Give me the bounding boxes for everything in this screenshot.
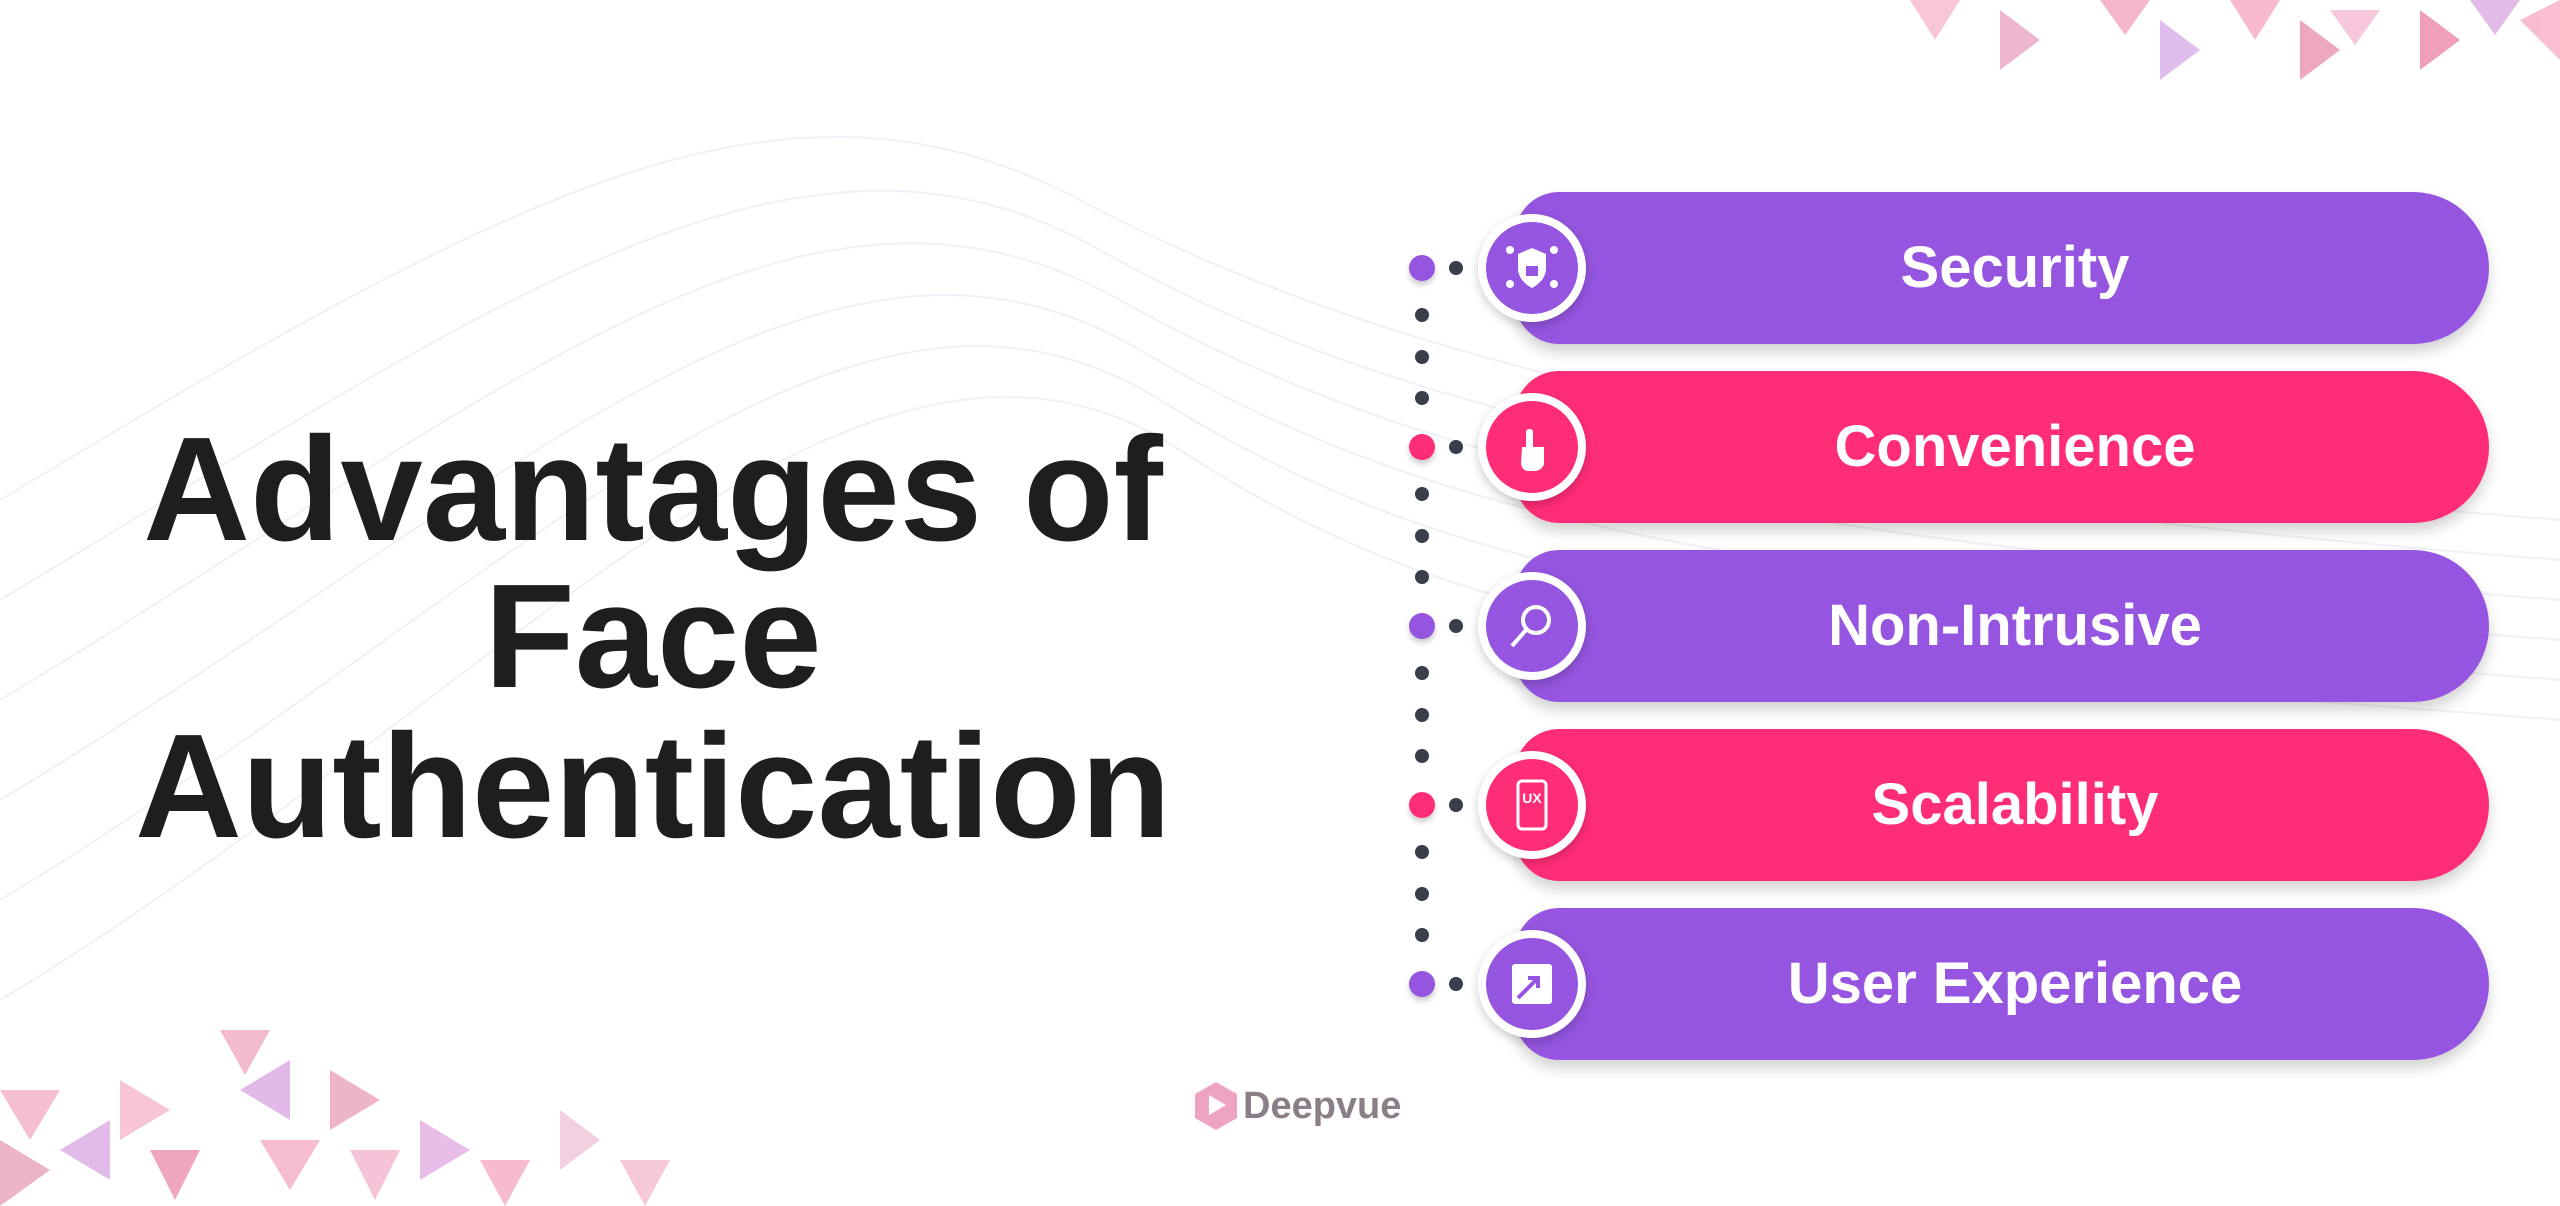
- item: Convenience: Convenience: [1834, 414, 2196, 479]
- triangles bottom-left: [0, 1030, 670, 1206]
- item: Non-Intrusive: Non-Intrusive: [1828, 593, 2202, 658]
- title: [135, 407, 1171, 869]
- item: Security: Security: [1901, 235, 2129, 300]
- item: Scalability: Scalability: [1872, 772, 2158, 837]
- triangles top-right: [1910, 0, 2560, 80]
- title: Face: [484, 554, 822, 719]
- timeline dots: [1415, 308, 1429, 942]
- item: Convenience: [1515, 371, 2489, 523]
- text: UX: [1522, 790, 1542, 806]
- title: Authentication: [135, 704, 1171, 869]
- item: Scalability: [1515, 729, 2489, 881]
- logo: Deepvue: [1195, 1082, 1401, 1130]
- item: Non-Intrusive: [1515, 550, 2489, 702]
- title: Advantages of: [143, 407, 1163, 572]
- item: Security: [1515, 192, 2489, 344]
- logo: Deepvue: Deepvue: [1243, 1085, 1401, 1127]
- item: User Experience: [1515, 908, 2489, 1060]
- item: User Experience: User Experience: [1788, 951, 2242, 1016]
